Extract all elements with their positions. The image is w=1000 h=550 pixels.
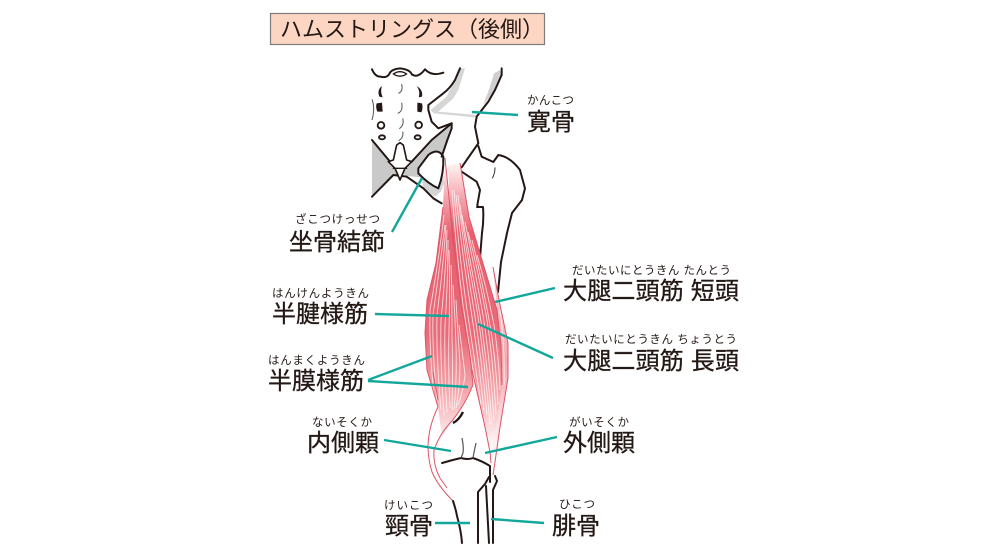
label: 半腱様筋: 半腱様筋 bbox=[272, 301, 368, 328]
leader lines: 半膜様筋 bbox=[368, 356, 468, 387]
pelvis grey bone shading bbox=[372, 142, 402, 196]
label: 大腿二頭筋 短頭 bbox=[563, 264, 739, 305]
label: 外側顆 bbox=[563, 415, 635, 457]
label: 坐骨結節: ざこつけっせつ bbox=[295, 212, 380, 226]
label: 寛骨: 寛骨 bbox=[527, 109, 575, 136]
label: 半腱様筋 bbox=[272, 287, 369, 328]
leader line: 大腿二頭筋 短頭 bbox=[495, 288, 555, 302]
muscle fibres bbox=[430, 190, 504, 425]
label: 腓骨: ひこつ bbox=[559, 499, 595, 511]
leader line: 内側顆 bbox=[384, 440, 451, 451]
coccyx bbox=[388, 143, 412, 180]
illustration: pelvis and femur bones bbox=[372, 68, 525, 207]
short head of biceps femoris bbox=[490, 267, 508, 470]
hip grey shading bbox=[431, 68, 477, 117]
label: 大腿二頭筋 長頭 bbox=[563, 333, 739, 375]
leader line: 外側顆 bbox=[485, 437, 557, 453]
label: 内側顆 bbox=[307, 416, 379, 457]
label: 大腿二頭筋 短頭: だいたいにとうきん たんとう bbox=[572, 264, 731, 277]
label: 寛骨 bbox=[527, 94, 575, 136]
label: 寛骨: かんこつ bbox=[527, 94, 574, 107]
leader line: 坐骨結節 bbox=[392, 178, 422, 232]
leader line: 頸骨 bbox=[435, 522, 470, 524]
biceps femoris long head bbox=[448, 163, 502, 455]
illustration: knee and lower leg bones bbox=[442, 412, 497, 543]
label: 半膜様筋: 半膜様筋 bbox=[268, 368, 364, 395]
ilium inner outline bbox=[428, 68, 460, 157]
lower pelvis outlines bbox=[372, 123, 452, 162]
label: 外側顆: 外側顆 bbox=[563, 430, 635, 457]
sacrum top outline bbox=[372, 68, 443, 77]
sacral foramina bbox=[376, 86, 423, 112]
leader line: 半腱様筋 bbox=[375, 314, 449, 316]
label: 坐骨結節: 坐骨結節 bbox=[289, 229, 385, 256]
semimembranosus and semitendinosus muscle bbox=[425, 160, 473, 437]
label: 頸骨: けいこつ bbox=[384, 499, 433, 512]
label: 頸骨: 頸骨 bbox=[385, 513, 433, 540]
label: 外側顆: がいそくか bbox=[569, 415, 630, 429]
femur shaft bbox=[477, 200, 522, 292]
title: ハムストリングス（後側） bbox=[280, 17, 544, 42]
label: 内側顆: ないそくか bbox=[312, 416, 372, 429]
leader line: 寛骨 bbox=[472, 112, 518, 115]
label: 半膜様筋: はんまくようきん bbox=[268, 354, 365, 367]
label: 腓骨 bbox=[552, 499, 600, 540]
label: 大腿二頭筋 長頭: 大腿二頭筋 長頭 bbox=[563, 348, 739, 375]
label: 内側顆: 内側顆 bbox=[307, 430, 379, 457]
label: 坐骨結節 bbox=[289, 212, 385, 256]
leader line: 腓骨 bbox=[491, 519, 544, 523]
label: 腓骨: 腓骨 bbox=[552, 513, 600, 540]
illustration: hamstring muscles bbox=[425, 158, 508, 501]
leader line: 大腿二頭筋 長頭 bbox=[478, 324, 553, 358]
label: 大腿二頭筋 長頭: だいたいにとうきん ちょうとう bbox=[565, 333, 737, 346]
label: 大腿二頭筋 短頭: 大腿二頭筋 短頭 bbox=[563, 278, 739, 305]
femur head and shaft bbox=[462, 68, 502, 167]
muscle outlines bbox=[425, 158, 508, 501]
label: 半膜様筋 bbox=[268, 354, 365, 395]
label: 半腱様筋: はんけんようきん bbox=[272, 287, 369, 300]
obturator foramen bbox=[418, 152, 443, 188]
label: 頸骨 bbox=[384, 499, 433, 540]
